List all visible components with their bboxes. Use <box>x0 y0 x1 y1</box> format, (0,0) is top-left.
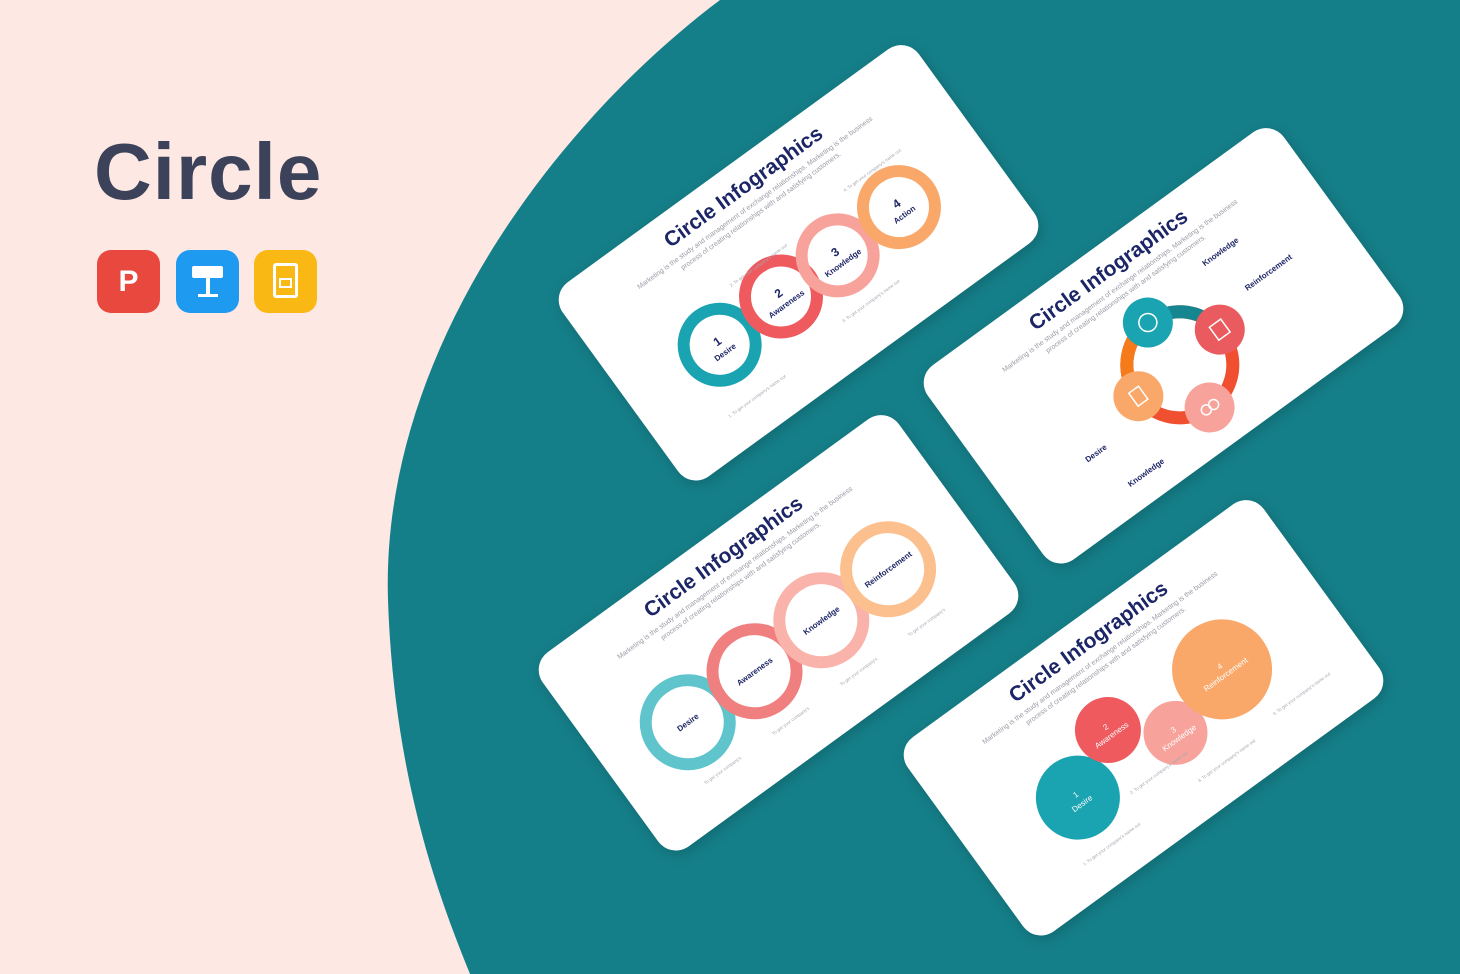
panel: card 4 bubbles: 4 <box>1216 661 1225 671</box>
panel: card 4 bubbles: 2. To get your company's name out <box>1129 750 1189 795</box>
panel: card 4 bubbles: 2 <box>1101 722 1111 732</box>
panel: card 2 cycle: Knowledge <box>1201 235 1241 268</box>
icon: google slides <box>254 250 317 313</box>
panel: card 4 bubbles: Awareness <box>1093 720 1130 751</box>
panel: card 1 rings: 1 <box>710 334 724 349</box>
panel: card 3 linked rings: To get your company's <box>839 656 879 687</box>
panel: card 1 rings: 3 <box>828 244 842 260</box>
panel: card 3 linked rings: Desire <box>676 711 701 733</box>
panel: card 2 cycle <box>915 119 1412 572</box>
panel: card 1 rings: Marketing is the study and management of exchange relationships. Marketing is the business <box>636 115 875 291</box>
panel: card 4 bubbles: Reinforcement <box>1202 655 1250 694</box>
panel: card 3 linked rings: Marketing is the study and management of exchange relationships. Marketing is the business <box>616 485 855 661</box>
icon: keynote <box>176 250 239 313</box>
panel: card 1 rings: 3. To get your company's name out <box>841 278 901 324</box>
panel: card 2 cycle: Knowledge <box>1126 456 1167 489</box>
panel: card 4 bubbles: Circle Infographics <box>1005 577 1172 707</box>
panel: card 4 bubbles: Knowledge <box>1161 723 1198 753</box>
panel: card 3 linked rings: To get your company's <box>907 607 947 637</box>
panel: card 3 linked rings: Awareness <box>735 655 775 688</box>
panel: card 3 linked rings: process of creating relationships with and satisfying customers. <box>660 521 822 642</box>
icon: powerpoint <box>97 250 160 313</box>
panel: card 1 rings: Circle Infographics <box>660 122 827 252</box>
panel: card 3 linked rings: To get your company's <box>771 705 811 736</box>
panel: card 4 bubbles: 1 <box>1071 789 1081 800</box>
panel: card 2 cycle: Reinforcement <box>1243 252 1294 293</box>
panel: card 3 linked rings: Knowledge <box>802 604 842 637</box>
panel: card 3 linked rings: Reinforcement <box>863 549 914 590</box>
panel: card 3 linked rings <box>530 406 1027 859</box>
title: Circle <box>94 127 322 216</box>
panel: card 2 cycle: Circle Infographics <box>1025 205 1192 335</box>
panel: card 1 rings: 2. To get your company's name out <box>729 242 789 288</box>
panel: card 1 rings: 2 <box>772 285 786 301</box>
panel: card 2 cycle: process of creating relationships with and satisfying customers. <box>1045 234 1207 355</box>
panel: card 4 bubbles: Desire <box>1070 793 1095 814</box>
panel: card 4 bubbles: 1. To get your company's name out <box>1082 821 1142 867</box>
panel: card 1 rings: 1. To get your company's name out <box>727 373 787 419</box>
panel: card 4 bubbles <box>895 491 1392 944</box>
panel: card 1 rings: Desire <box>713 341 738 363</box>
panel: card 2 cycle: Marketing is the study and management of exchange relationships. Marketing is the business <box>1001 198 1240 374</box>
panel: card 4 bubbles: 3. To get your company's name out <box>1197 738 1257 783</box>
panel: card 1 rings: 4 <box>890 196 904 211</box>
panel: card 3 linked rings: Circle Infographics <box>640 492 807 622</box>
panel: card 1 rings: process of creating relationships with and satisfying customers. <box>680 151 842 272</box>
panel: card 4 bubbles: process of creating relationships with and satisfying customers. <box>1025 606 1187 727</box>
panel: card 3 linked rings: To get your company's <box>703 755 743 786</box>
panel: card 1 rings: 4. To get your company's name out <box>843 147 903 193</box>
panel: card 1 rings: Awareness <box>767 288 807 320</box>
panel: card 1 rings: Action <box>892 204 917 226</box>
panel: card 2 cycle: Desire <box>1084 442 1109 464</box>
icon: powerpoint: P <box>118 265 138 298</box>
panel: card 1 rings: Knowledge <box>823 247 864 279</box>
panel: card 4 bubbles: 3 <box>1169 725 1178 735</box>
panel: card 4 bubbles: 4. To get your company's name out <box>1272 671 1332 716</box>
panel: card 1 rings <box>550 36 1047 489</box>
panel: card 4 bubbles: Marketing is the study and management of exchange relationships. Marketing is the business <box>981 570 1220 746</box>
